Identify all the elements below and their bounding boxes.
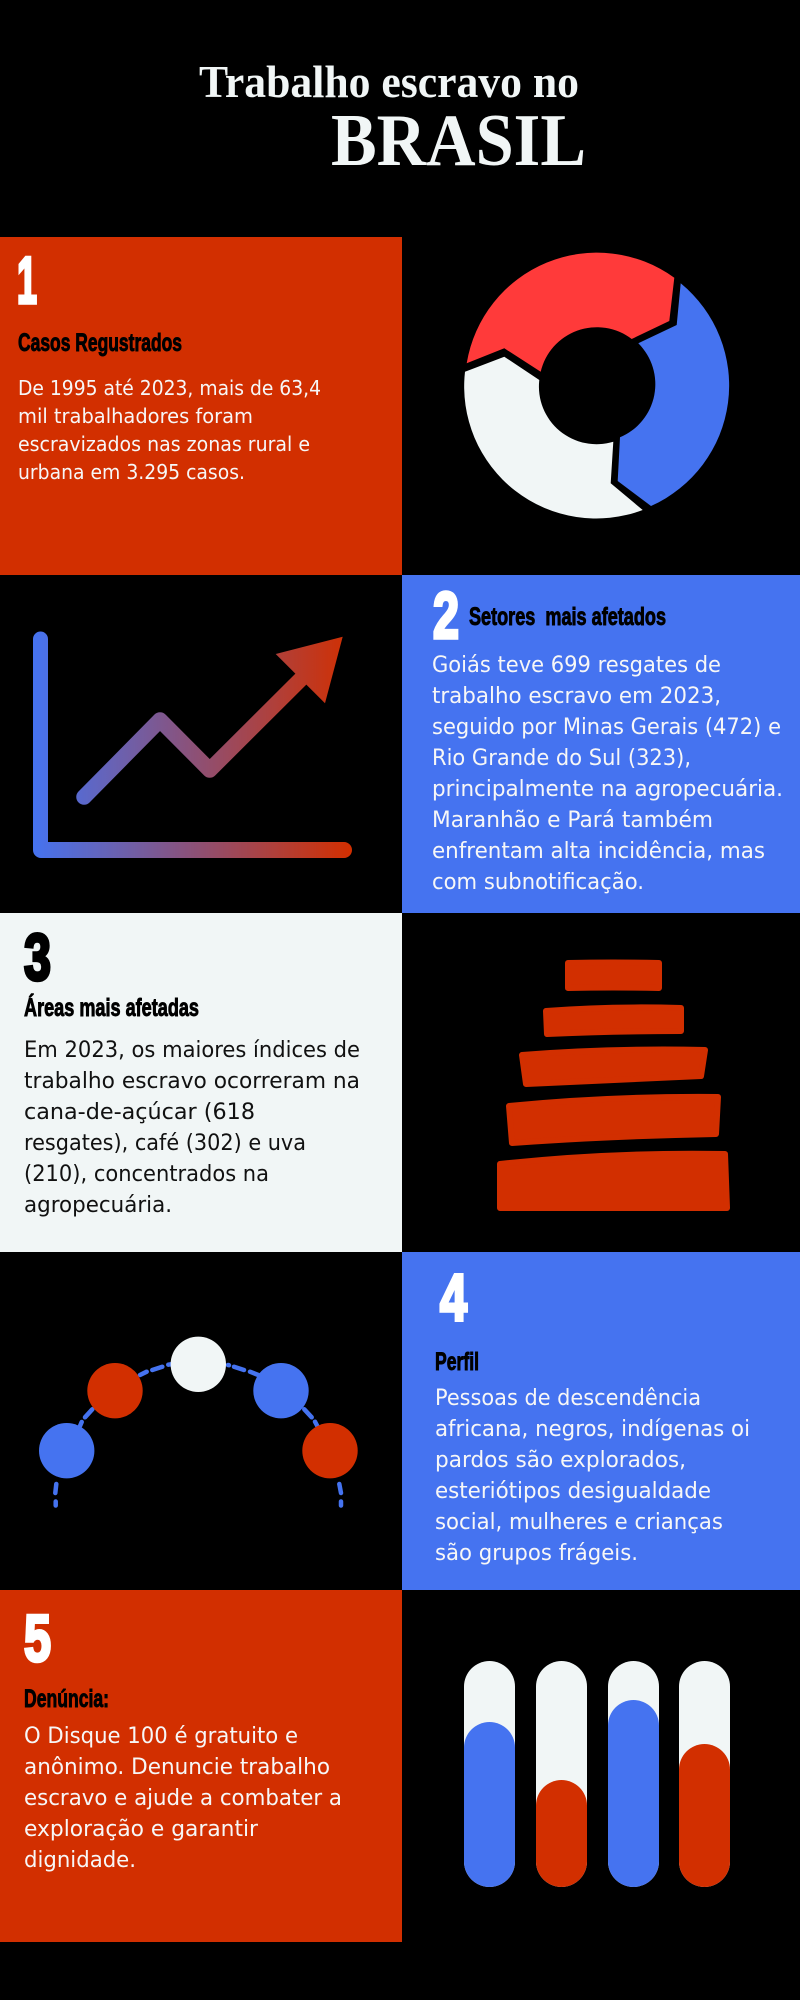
text block: casos: escravizados nas zonas rural e bbox=[18, 432, 310, 456]
text block: setores: principalmente na agropecuária. bbox=[432, 777, 783, 802]
panel: 5 denuncia bbox=[0, 1590, 402, 1942]
chart: donut bbox=[464, 253, 729, 518]
heading: setores mais afetados: Setores mais afetados bbox=[469, 603, 666, 631]
text block: denuncia: exploração e garantir bbox=[24, 1817, 259, 1842]
panel: 2 setores bbox=[402, 575, 800, 913]
panel: 3 areas bbox=[0, 913, 402, 1252]
text block: areas: Em 2023, os maiores índices de bbox=[24, 1038, 360, 1063]
text block: perfil: social, mulheres e crianças bbox=[435, 1510, 723, 1535]
number 2: 2 bbox=[433, 578, 459, 652]
text block: areas: cana-de-açúcar (618 bbox=[24, 1100, 255, 1125]
title: Trabalho escravo no bbox=[199, 56, 579, 107]
chart: arc of circles bbox=[39, 1337, 358, 1506]
number 1: 1 bbox=[17, 243, 37, 317]
chart: stacked pyramid bbox=[500, 962, 727, 1208]
text block: setores bbox=[432, 653, 783, 895]
number 4: 4 bbox=[440, 1260, 467, 1334]
heading: casos regustrados: Casos Regustrados bbox=[18, 329, 182, 357]
title: BRASIL bbox=[331, 100, 586, 182]
heading: perfil: Perfil bbox=[435, 1348, 479, 1376]
text block: perfil: Pessoas de descendência bbox=[435, 1386, 701, 1411]
text block: casos: urbana em 3.295 casos. bbox=[18, 460, 245, 484]
text block: casos: De 1995 até 2023, mais de 63,4 bbox=[18, 376, 321, 400]
text block: setores: Maranhão e Pará também bbox=[432, 808, 713, 833]
text block: casos: mil trabalhadores foram bbox=[18, 404, 253, 428]
chart: progress bars bbox=[464, 1661, 730, 1887]
heading: denuncia: Denúncia: bbox=[24, 1685, 109, 1713]
text block: areas: agropecuária. bbox=[24, 1193, 172, 1218]
number 5: 5 bbox=[24, 1601, 51, 1675]
number 3: 3 bbox=[24, 920, 51, 994]
text block: denuncia: anônimo. Denuncie trabalho bbox=[24, 1755, 330, 1780]
text block: perfil bbox=[435, 1386, 750, 1566]
title bbox=[199, 56, 586, 182]
text block: denuncia: O Disque 100 é gratuito e bbox=[24, 1724, 298, 1749]
text block: setores: Goiás teve 699 resgates de bbox=[432, 653, 721, 678]
text block: areas: trabalho escravo ocorreram na bbox=[24, 1069, 360, 1094]
chart: rising arrow bbox=[33, 632, 352, 858]
text block: casos bbox=[18, 376, 321, 484]
text block: denuncia: escravo e ajude a combater a bbox=[24, 1786, 342, 1811]
text block: perfil: pardos são explorados, bbox=[435, 1448, 686, 1473]
text block: setores: enfrentam alta incidência, mas bbox=[432, 839, 765, 864]
text block: perfil: africana, negros, indígenas oi bbox=[435, 1417, 750, 1442]
panel: 4 perfil bbox=[402, 1252, 800, 1590]
text block: setores: seguido por Minas Gerais (472) e bbox=[432, 715, 781, 740]
heading: areas mais afetadas: Áreas mais afetadas bbox=[24, 993, 199, 1022]
text block: denuncia: dignidade. bbox=[24, 1848, 136, 1873]
text block: denuncia bbox=[24, 1724, 342, 1873]
text block: areas: resgates), café (302) e uva bbox=[24, 1131, 306, 1156]
text block: setores: com subnotificação. bbox=[432, 870, 644, 895]
text block: areas: (210), concentrados na bbox=[24, 1162, 269, 1187]
text block: areas bbox=[24, 1038, 360, 1218]
text block: perfil: são grupos frágeis. bbox=[435, 1541, 638, 1566]
panel: 1 casos registrados bbox=[0, 237, 402, 575]
text block: perfil: esteriótipos desigualdade bbox=[435, 1479, 711, 1504]
text block: setores: trabalho escravo em 2023, bbox=[432, 684, 721, 709]
text block: setores: Rio Grande do Sul (323), bbox=[432, 746, 691, 771]
